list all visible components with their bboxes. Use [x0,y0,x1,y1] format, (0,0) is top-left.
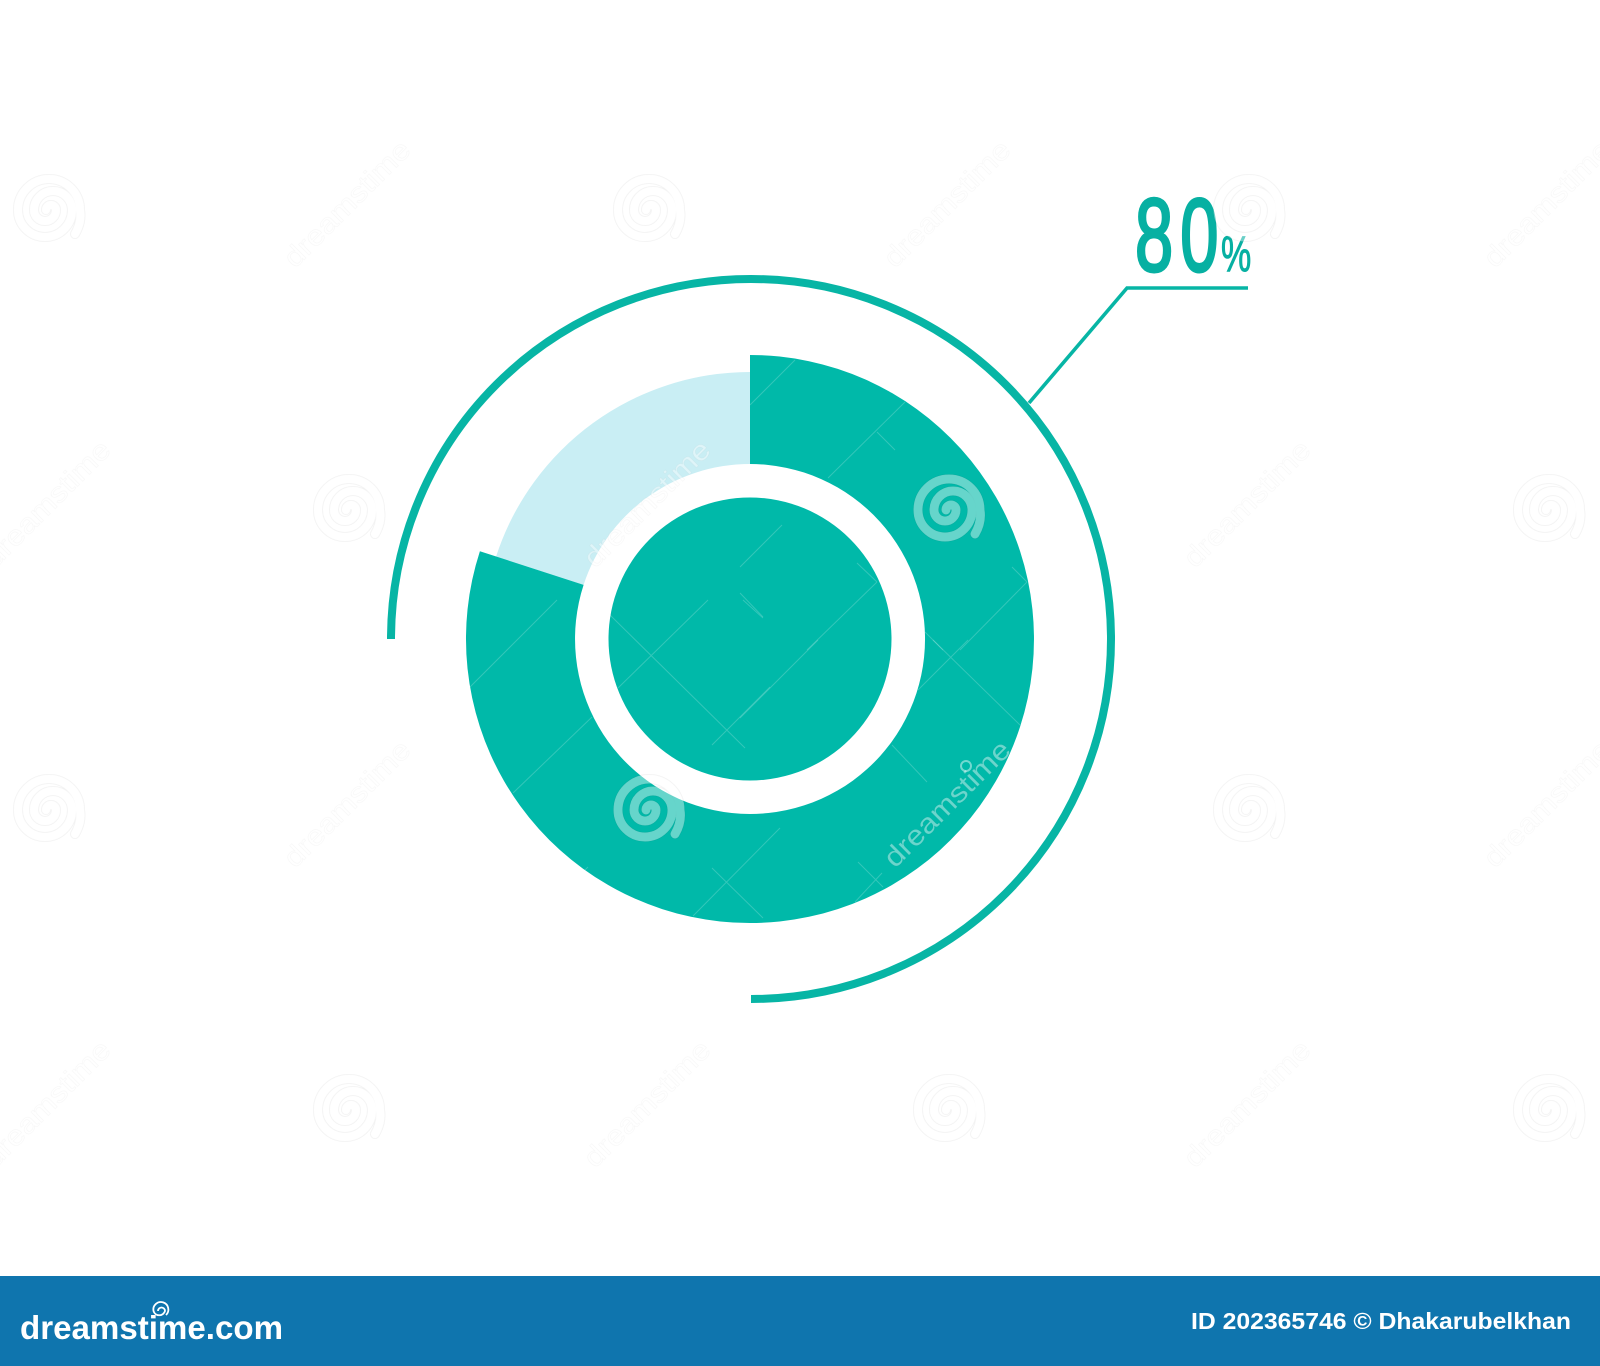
footer logo: dreamstime.com [20,1309,283,1346]
footer bar [0,1276,1600,1366]
leader line [1029,288,1248,403]
watermark text: dreamstime [877,134,1017,273]
watermark text: dreamstime [1477,134,1600,273]
main 80 percent segment [466,355,1034,923]
remaining 20 percent segment [496,372,750,585]
watermark spirals [18,179,1580,1137]
donut chart: 80 percent [391,279,1111,999]
inner disc [608,498,892,780]
watermark text: dreamstime [577,434,717,573]
percent sign: % [1221,227,1251,283]
image id and credit: ID 202365746 © Dhakarubelkhan [1191,1308,1571,1334]
watermark text: dreamstime [1477,734,1600,873]
watermark text: dreamstime [577,1034,717,1173]
value 80: 80 [1135,177,1218,293]
outer progress arc [391,279,1111,999]
watermark text: dreamstime [1177,1034,1317,1173]
icon: logo spiral [153,1302,168,1315]
watermark text: dreamstime [277,134,417,273]
watermark logo dot on teal segment [961,761,971,771]
watermark text: dreamstime [877,734,1017,873]
watermark text: dreamstime [277,734,417,873]
watermark text [0,134,1600,1173]
watermark crosshair lines [470,360,1027,918]
percentage label [1135,177,1251,293]
watermark text: dreamstime [1177,434,1317,573]
